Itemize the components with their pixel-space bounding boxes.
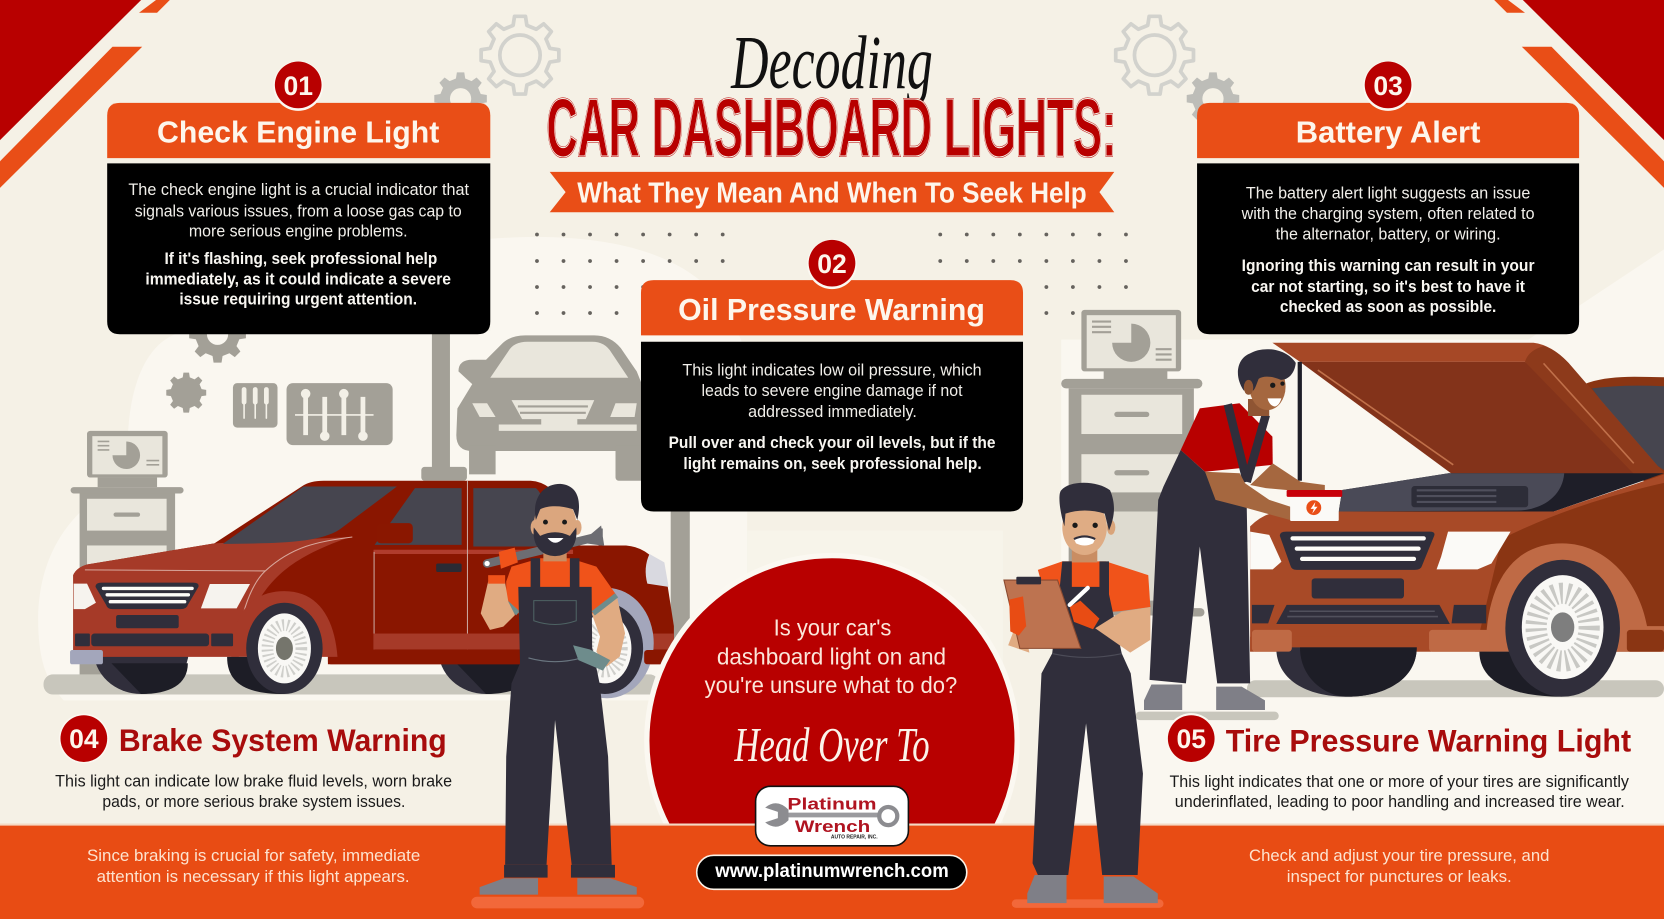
- trouser cuffs: [504, 865, 615, 878]
- hood prop rod: [1298, 362, 1302, 481]
- badge 01: [273, 61, 323, 111]
- red call-to-action circle: [647, 556, 1017, 919]
- badge 04: 04: [69, 724, 99, 754]
- logo: Platinum Wrench: Wrench: [795, 817, 870, 836]
- headlights: [74, 584, 250, 609]
- hood and bumper: [73, 537, 350, 657]
- clipboard: [1004, 577, 1081, 648]
- front wheel: [227, 603, 323, 694]
- badge 02: [807, 239, 857, 289]
- badge 03: 03: [1373, 71, 1403, 101]
- body text: checked as soon as possible.: [1280, 297, 1496, 316]
- description: This light can indicate low brake fluid levels, worn brake: [55, 771, 452, 790]
- shirt: [1038, 561, 1150, 615]
- logo: Platinum Wrench: Platinum: [787, 796, 877, 814]
- car body: [1250, 474, 1664, 652]
- body text: more serious engine problems.: [189, 222, 408, 241]
- engine bay: [1339, 473, 1664, 511]
- grille: [1280, 532, 1434, 570]
- title: [547, 20, 1116, 174]
- cabin: [1584, 377, 1664, 488]
- body text: signals various issues, from a loose gas cap to: [135, 201, 462, 220]
- subtitle ribbon: What They Mean And When To Seek Help: [577, 178, 1087, 210]
- badge 05: 05: [1176, 724, 1206, 754]
- panel: check engine light: [107, 61, 490, 334]
- description: [55, 771, 452, 811]
- heading: Battery Alert: [1296, 115, 1480, 150]
- panel: oil pressure warning: [641, 239, 1023, 511]
- body text: If it's flashing, seek professional help: [164, 249, 437, 268]
- logo: Platinum Wrench: AUTO REPAIR, INC.: [831, 834, 878, 840]
- advice: attention is necessary if this light appears.: [97, 867, 410, 886]
- mechanic with clipboard: [1004, 483, 1164, 908]
- section: tire pressure warning light: [1166, 713, 1631, 886]
- description: This light indicates that one or more of your tires are significantly: [1169, 772, 1629, 791]
- website pill: [697, 855, 967, 889]
- rear fender and wheel: [560, 588, 674, 698]
- dot grid right: [940, 235, 1129, 313]
- body text: This light indicates low oil pressure, which: [682, 361, 982, 380]
- right arm: [592, 595, 625, 667]
- floor shadow: [1012, 899, 1164, 908]
- battery: [1287, 490, 1342, 521]
- heading: Check Engine Light: [157, 115, 439, 150]
- mechanic with wrench: [471, 484, 644, 908]
- title: Decoding script: Decoding: [731, 20, 933, 105]
- advice: inspect for punctures or leaks.: [1287, 867, 1512, 886]
- ground shadow: [1247, 680, 1664, 697]
- badge 05: [1166, 713, 1217, 764]
- arm: [1095, 607, 1150, 653]
- call to action text: [705, 615, 957, 772]
- advice: [87, 846, 420, 886]
- monitor: [87, 431, 168, 487]
- headlights: [1250, 532, 1511, 569]
- far wheels: [93, 605, 189, 694]
- description: [1169, 772, 1629, 811]
- shirt: [1181, 403, 1273, 472]
- icon: wrench panel: [287, 383, 393, 445]
- gloves and pen: [1009, 588, 1099, 636]
- grille: [96, 583, 199, 609]
- body text: with the charging system, often related to: [1241, 204, 1535, 223]
- front wheel: [1479, 560, 1620, 697]
- shirt: [506, 558, 617, 613]
- body text: car not starting, so it's best to have it: [1251, 277, 1525, 296]
- advice: Since braking is crucial for safety, immediate: [87, 846, 420, 865]
- ground shadow: [44, 674, 659, 695]
- body text: [128, 180, 469, 309]
- left workbench with monitor: [71, 431, 184, 679]
- badge 01: 01: [283, 71, 313, 101]
- wrench tool: [484, 528, 602, 569]
- heading: Brake System Warning: [119, 722, 447, 758]
- script: head over to: Head Over To: [734, 718, 930, 772]
- car body: [73, 481, 674, 664]
- head: [1238, 349, 1296, 416]
- open hood: [1272, 343, 1664, 475]
- panel: battery alert: [1197, 61, 1579, 334]
- body text: issue requiring urgent attention.: [179, 290, 417, 309]
- right workbench with monitor: [1061, 310, 1204, 617]
- body text: light remains on, seek professional help.: [683, 454, 982, 473]
- icon: gears right: [1116, 16, 1239, 125]
- dot grid left: [537, 235, 726, 313]
- icon: screwdriver panel: [233, 383, 278, 428]
- wheel arch: [231, 591, 337, 657]
- badge 04: [59, 714, 109, 764]
- body text: addressed immediately.: [748, 402, 917, 421]
- website pill: www.platinumwrench.com: [714, 860, 949, 882]
- background light blobs: [38, 237, 1664, 826]
- windows: [223, 487, 397, 544]
- rear light: [646, 554, 669, 587]
- advice: Check and adjust your tire pressure, and: [1249, 846, 1549, 865]
- call to action text: Is your car's: [774, 615, 891, 641]
- head: [531, 484, 582, 561]
- trousers: [1150, 450, 1250, 683]
- shadow: [1136, 712, 1279, 720]
- title: Car Dashboard Lights: [547, 81, 1116, 174]
- head: [1059, 483, 1115, 562]
- title: Car Dashboard Lights: CAR DASHBOARD LIGHTS:: [547, 81, 1116, 174]
- corner decoration: top left: [0, 0, 170, 188]
- arms: [1205, 463, 1325, 520]
- body text: Pull over and check your oil levels, but if the: [669, 433, 995, 452]
- pocket: [534, 601, 576, 625]
- body text: [1241, 183, 1535, 316]
- body text: the alternator, battery, or wiring.: [1276, 224, 1501, 243]
- near front tire: [1276, 647, 1417, 697]
- overalls: [1033, 561, 1143, 875]
- body text: The check engine light is a crucial indicator that: [128, 180, 469, 199]
- wheel arch: [1486, 543, 1664, 652]
- mechanic with battery: [1136, 349, 1342, 720]
- brown car with open hood: [1247, 343, 1664, 697]
- icon: gears left: [434, 16, 559, 125]
- description: pads, or more serious brake system issues.: [102, 792, 405, 811]
- shoes: [1144, 684, 1265, 710]
- call to action text: dashboard light on and: [717, 643, 946, 669]
- door trim: [374, 550, 573, 554]
- title: Car Dashboard Lights: CAR DASHBOARD LIGHTS:: [547, 81, 1116, 174]
- bumper details: [75, 615, 233, 646]
- description: underinflated, leading to poor handling and increased tire wear.: [1175, 792, 1625, 811]
- badge 03: [1363, 61, 1413, 111]
- shoes: [1027, 875, 1158, 903]
- floor shadow: [471, 897, 644, 908]
- bumper details: [1252, 578, 1486, 624]
- badge 02: 02: [817, 249, 847, 279]
- icon: wrench: [765, 803, 897, 827]
- heading: Oil Pressure Warning: [678, 292, 985, 327]
- call to action text: you're unsure what to do?: [705, 672, 957, 698]
- body text: Ignoring this warning can result in your: [1242, 256, 1535, 275]
- corner decoration: top right: [1494, 0, 1664, 188]
- section: brake system warning: [55, 714, 452, 886]
- glove: [573, 645, 610, 671]
- body text: The battery alert light suggests an issue: [1246, 183, 1530, 202]
- body text: [669, 361, 995, 473]
- red car: [44, 481, 674, 698]
- body text: immediately, as it could indicate a severe: [145, 269, 451, 288]
- shoes: [480, 878, 637, 895]
- bottom orange band: [0, 825, 1664, 919]
- heading: Tire Pressure Warning Light: [1226, 722, 1631, 758]
- body text: leads to severe engine damage if not: [701, 381, 963, 400]
- gray car: [456, 335, 649, 474]
- icon: workshop gears: [166, 306, 246, 413]
- overalls: [505, 558, 612, 865]
- lift posts and gray car: [421, 318, 690, 663]
- logo: Platinum Wrench: [756, 786, 908, 846]
- monitor: [1081, 310, 1181, 380]
- raised forearm: [481, 582, 515, 630]
- advice: [1249, 846, 1549, 886]
